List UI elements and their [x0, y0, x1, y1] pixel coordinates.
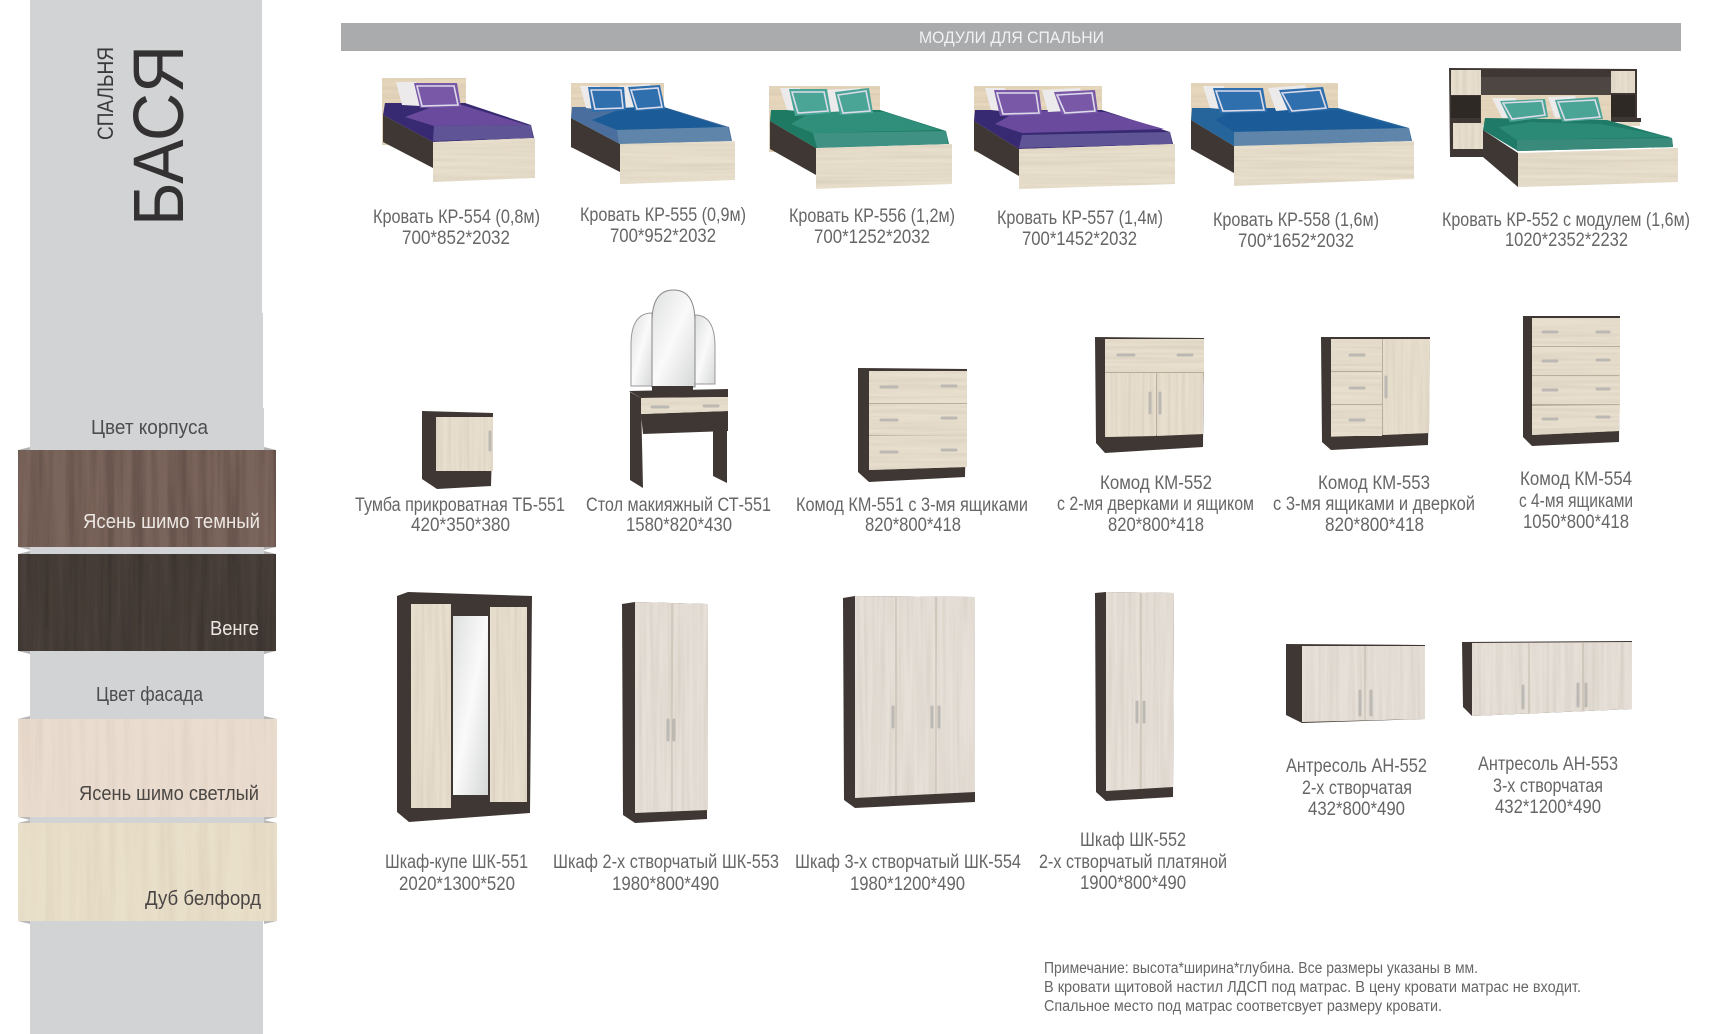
wall module frame — [1449, 68, 1641, 157]
caption: 700*1252*2032 — [814, 227, 930, 248]
product: mezzanine AN-553 — [1462, 641, 1632, 818]
caption: Кровать КР-554 (0,8м) — [373, 207, 540, 228]
illustration: blue bed — [571, 83, 735, 184]
caption: Кровать КР-555 (0,9м) — [580, 205, 746, 226]
caption: Шкаф-купе ШК-551 — [385, 852, 528, 873]
caption — [1478, 754, 1618, 818]
heading: body colour: Цвет корпуса — [91, 417, 209, 439]
caption: 820*800*418 — [1325, 515, 1424, 536]
title: series name — [93, 45, 199, 226]
illustration: bedside table — [422, 411, 493, 489]
caption: Комод КМ-553 — [1318, 473, 1430, 494]
product: vanity table ST-551 — [586, 290, 771, 536]
swatch: dark shimo ash — [18, 447, 276, 550]
caption: с 4-мя ящиками — [1519, 491, 1633, 512]
illustration: three door wardrobe — [843, 596, 975, 808]
caption — [1039, 830, 1227, 894]
heading: facade colour: Цвет фасада — [96, 684, 204, 706]
caption: 1050*800*418 — [1523, 512, 1629, 533]
caption: 2-х створчатая — [1302, 778, 1412, 799]
caption — [1057, 473, 1254, 536]
caption: 1580*820*430 — [626, 515, 732, 536]
swatch: light shimo ash: Ясень шимо светлый — [79, 783, 259, 805]
product: bed KR-554 — [373, 78, 540, 249]
caption: 3-х створчатая — [1493, 776, 1603, 797]
caption: 420*350*380 — [411, 515, 510, 536]
caption: 1980*1200*490 — [850, 874, 965, 895]
illustration: wide blue bed — [1191, 83, 1414, 186]
swatch: wenge: Венге — [210, 618, 259, 640]
swatch: belford oak — [18, 820, 277, 924]
product: dresser KM-551 — [796, 368, 1028, 536]
caption — [1286, 756, 1427, 820]
product: wardrobe SHK-553 — [553, 602, 779, 895]
illustration: sliding wardrobe with mirror — [397, 592, 532, 822]
caption — [586, 495, 771, 536]
caption: с 2-мя дверками и ящиком — [1057, 494, 1254, 515]
swatch: light shimo ash — [18, 716, 277, 820]
caption: Кровать КР-558 (1,6м) — [1213, 210, 1379, 231]
note block: В кровати щитовой настил ЛДСП под матрас. В цену кровати матрас не входит. — [1044, 979, 1581, 996]
product: dresser KM-554 — [1519, 316, 1633, 533]
caption: 700*1652*2032 — [1238, 231, 1354, 252]
illustration: vanity with triple mirror — [629, 290, 728, 488]
caption: 700*1452*2032 — [1022, 229, 1137, 250]
product: wardrobe SHK-554 — [795, 596, 1021, 895]
caption: Шкаф 3-х створчатый ШК-554 — [795, 852, 1021, 873]
product: sliding wardrobe SHK-551 — [385, 592, 532, 895]
caption: 2-х створчатый платяной — [1039, 852, 1227, 873]
product: bed KR-558 — [1191, 83, 1414, 252]
caption: 432*1200*490 — [1495, 797, 1601, 818]
caption: Комод КМ-552 — [1100, 473, 1212, 494]
illustration: two door mezzanine — [1286, 644, 1425, 723]
caption: Комод КМ-551 с 3-мя ящиками — [796, 495, 1028, 516]
caption: 1020*2352*2232 — [1505, 230, 1628, 251]
illustration: dresser with drawers and door — [1321, 337, 1430, 450]
caption — [796, 495, 1028, 536]
heading: Basya: БАСЯ — [120, 45, 199, 226]
product: dresser KM-552 — [1057, 337, 1254, 536]
caption: Антресоль АН-553 — [1478, 754, 1618, 775]
caption — [553, 852, 779, 895]
caption: 700*952*2032 — [610, 226, 716, 247]
product: mezzanine AN-552 — [1286, 644, 1427, 820]
panel: sidebar — [18, 0, 277, 1034]
caption: Шкаф ШК-552 — [1080, 830, 1186, 851]
caption — [385, 852, 528, 895]
caption — [795, 852, 1021, 895]
swatch: belford oak: Дуб белфорд — [145, 888, 261, 910]
caption: 2020*1300*520 — [399, 874, 515, 895]
caption — [1519, 469, 1633, 533]
note block: Спальное место под матрас соответсвует размеру кровати. — [1044, 998, 1442, 1015]
header bar: bedroom modules — [341, 23, 1681, 51]
caption — [997, 208, 1163, 250]
product: bedside table TB-551 — [355, 411, 565, 536]
illustration: two door wardrobe — [622, 602, 708, 823]
caption — [373, 207, 540, 249]
caption: Стол макияжный СТ-551 — [586, 495, 771, 516]
illustration: four drawer dresser — [1523, 316, 1620, 446]
caption: 1980*800*490 — [612, 874, 719, 895]
product: bed KR-556 — [769, 86, 955, 248]
caption — [580, 205, 746, 247]
caption: Антресоль АН-552 — [1286, 756, 1427, 777]
swatch: dark shimo ash: Ясень шимо темный — [83, 511, 260, 533]
product: wardrobe SHK-552 — [1039, 592, 1227, 894]
illustration: wide purple bed — [974, 86, 1175, 189]
note block: Примечание: высота*ширина*глубина. Все размеры указаны в мм. — [1044, 960, 1478, 977]
caption: Кровать КР-557 (1,4м) — [997, 208, 1163, 229]
product: dresser KM-553 — [1273, 337, 1475, 536]
caption: 820*800*418 — [1108, 515, 1204, 536]
caption: Кровать КР-556 (1,2м) — [789, 206, 955, 227]
note block — [1044, 960, 1581, 1015]
caption — [355, 495, 565, 536]
swatch: wenge — [18, 551, 276, 654]
illustration: purple single bed — [382, 78, 535, 182]
caption — [1273, 473, 1475, 536]
caption — [789, 206, 955, 248]
product: bed KR-555 — [571, 83, 746, 247]
caption: Комод КМ-554 — [1520, 469, 1632, 490]
header bar: bedroom modules: МОДУЛИ ДЛЯ СПАЛЬНИ — [919, 28, 1104, 47]
caption — [1442, 210, 1690, 251]
caption: Шкаф 2-х створчатый ШК-553 — [553, 852, 779, 873]
illustration: bed with wall module — [1449, 68, 1678, 187]
illustration: three door mezzanine — [1462, 641, 1632, 716]
illustration: dresser with doors and drawer — [1095, 337, 1204, 453]
caption: 1900*800*490 — [1080, 873, 1186, 894]
product: bed KR-557 — [974, 86, 1175, 250]
caption: 820*800*418 — [865, 515, 961, 536]
caption: 700*852*2032 — [402, 228, 510, 249]
caption: 432*800*490 — [1308, 799, 1405, 820]
illustration: narrow two door wardrobe — [1095, 592, 1174, 801]
illustration: three drawer dresser — [858, 368, 967, 482]
subtitle: spalnya: СПАЛЬНЯ — [93, 47, 118, 140]
caption: с 3-мя ящиками и дверкой — [1273, 494, 1475, 515]
product: bed KR-552 with module — [1442, 68, 1690, 251]
caption: Тумба прикроватная ТБ-551 — [355, 495, 565, 516]
illustration: teal bed — [769, 86, 952, 189]
caption — [1213, 210, 1379, 252]
